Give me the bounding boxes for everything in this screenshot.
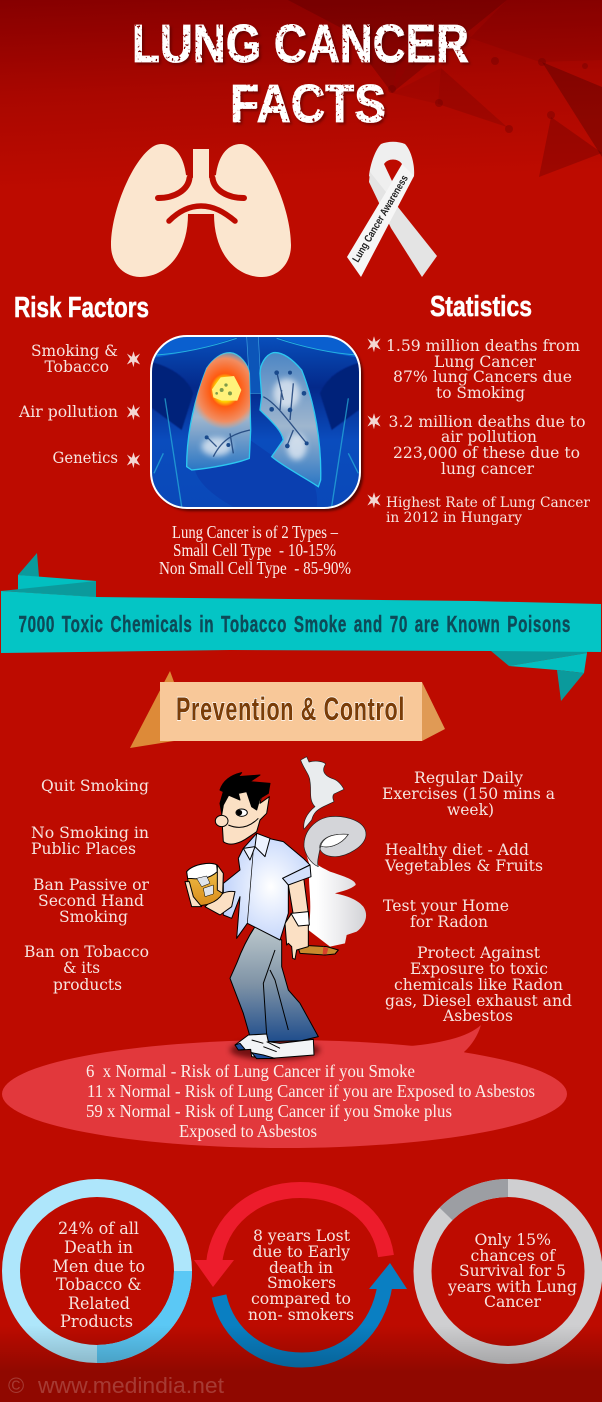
speech bubble: risk multipliers: 11 x Normal - Risk of Lung Cancer if you are Exposed to Asbestos [87,1081,535,1101]
donut: 15% survival: Only 15% [474,1231,551,1249]
prevention list left [24,777,150,994]
donut: 15% survival: years with Lung [447,1278,577,1296]
prevention list right: Healthy diet - Add [385,841,529,859]
circular arrows: 8 years lost: death in [269,1259,333,1277]
statistics list: to Smoking [436,384,525,402]
speech bubble: risk multipliers: 6 x Normal - Risk of Lung Cancer if you Smoke [86,1061,415,1081]
circular arrows: 8 years lost: non- smokers [248,1306,354,1324]
statistics list: 3.2 million deaths due to [388,413,586,431]
donut: 24% of deaths: Tobacco & [56,1275,142,1295]
icon: awareness ribbon [347,142,437,277]
statistics list: 1.59 million deaths from [386,337,580,355]
trousers [230,927,318,1042]
lung cancer types text: Non Small Cell Type - 85-90% [159,558,351,578]
prevention list right: gas, Diesel exhaust and [385,992,572,1010]
heading: risk factors: Risk Factors [14,292,149,324]
banner: toxic chemicals [1,553,601,701]
statistics list [367,336,590,526]
bottom shading over donuts [0,1325,602,1402]
donut: 24% of deaths [11,1188,183,1354]
donut: 15% survival: chances of [470,1247,556,1265]
prevention list left: Smoking [59,908,128,926]
prevention list right: for Radon [410,913,488,931]
circular arrows: 8 years lost: Smokers [267,1274,336,1292]
donut: 24% of deaths: Products [60,1312,133,1332]
circular arrows: 8 years lost: compared to [251,1290,351,1308]
circular arrows: 8 years lost: due to Early [252,1243,350,1261]
speech bubble: risk multipliers: 59 x Normal - Risk of Lung Cancer if you Smoke plus [86,1101,452,1121]
icon: awareness ribbon: Lung Cancer Awareness [350,173,411,265]
risk factors list: Air pollution [18,403,118,421]
title [132,14,469,134]
icon: lungs [111,144,291,277]
prevention list left: & its [63,959,100,977]
speech bubble: risk multipliers: Exposed to Asbestos [179,1121,317,1141]
prevention list right: Exercises (150 mins a [382,785,555,803]
prevention list right: Test your Home [383,897,509,915]
banner: prevention and control [130,671,445,748]
donut: 15% survival: Cancer [484,1293,542,1311]
banner: prevention and control: Prevention & Control [176,691,405,727]
statistics list: Highest Rate of Lung Cancer [386,495,590,511]
lung cancer types text: Small Cell Type - 10-15% [173,540,336,560]
shirt [223,833,310,940]
prevention list left: Quit Smoking [41,777,149,795]
donut: 15% survival: Survival for 5 [459,1262,566,1280]
statistics list: lung cancer [441,460,535,478]
title: LUNG CANCER [132,14,469,74]
hand with glass [185,863,235,915]
donut: 24% of deaths: 24% of all [58,1219,139,1239]
heading: statistics: Statistics [430,291,532,323]
prevention list left: Public Places [31,840,136,858]
statistics list: 223,000 of these due to [393,444,580,462]
polygon network decoration [288,0,602,177]
prevention list right: Vegetables & Fruits [384,857,543,875]
circular arrows: 8 years lost: 8 years Lost [253,1227,351,1245]
prevention list right: chemicals like Radon [394,976,563,994]
lung cancer types text [159,522,351,578]
statistics list: in 2012 in Hungary [386,510,522,526]
footer copyright: © [8,1373,24,1398]
prevention list left: No Smoking in [31,824,149,842]
speech bubble: risk multipliers [2,1025,567,1148]
donut: 24% of deaths: Death in [64,1238,133,1258]
risk factors list: Tobacco [44,358,109,376]
lung cancer types text: Lung Cancer is of 2 Types – [172,522,338,542]
risk factors list: Genetics [52,449,118,467]
donut: 24% of deaths: Related [68,1294,130,1314]
circular arrows: 8 years lost [194,1190,407,1360]
prevention list right: Protect Against [417,944,541,962]
donut: 15% survival [422,1188,594,1355]
prevention list right [382,769,572,1025]
footer copyright: www.medindia.net [37,1373,224,1398]
head [215,773,270,844]
prevention list left: Second Hand [38,892,144,910]
statistics list: air pollution [441,428,537,446]
smoke [301,757,366,947]
donut: 24% of deaths: Men due to [52,1257,145,1277]
prevention list right: Asbestos [442,1007,513,1025]
statistics list: Lung Cancer [434,353,537,371]
title: FACTS [230,74,386,134]
lung scan image [150,335,363,511]
forearm and hand with cigar [285,875,338,959]
shoes [235,1034,314,1059]
prevention list right: week) [447,801,494,819]
prevention list right: Regular Daily [414,769,523,787]
prevention list left: Ban Passive or [33,876,150,894]
statistics list: 87% lung Cancers due [393,368,572,386]
prevention list left: products [53,976,122,994]
prevention list right: Exposure to toxic [410,960,548,978]
prevention list left: Ban on Tobacco [24,943,149,961]
risk factors list [18,342,140,468]
illustration: man smoking and drinking [185,757,366,1060]
risk factors list: Smoking & [31,342,118,360]
